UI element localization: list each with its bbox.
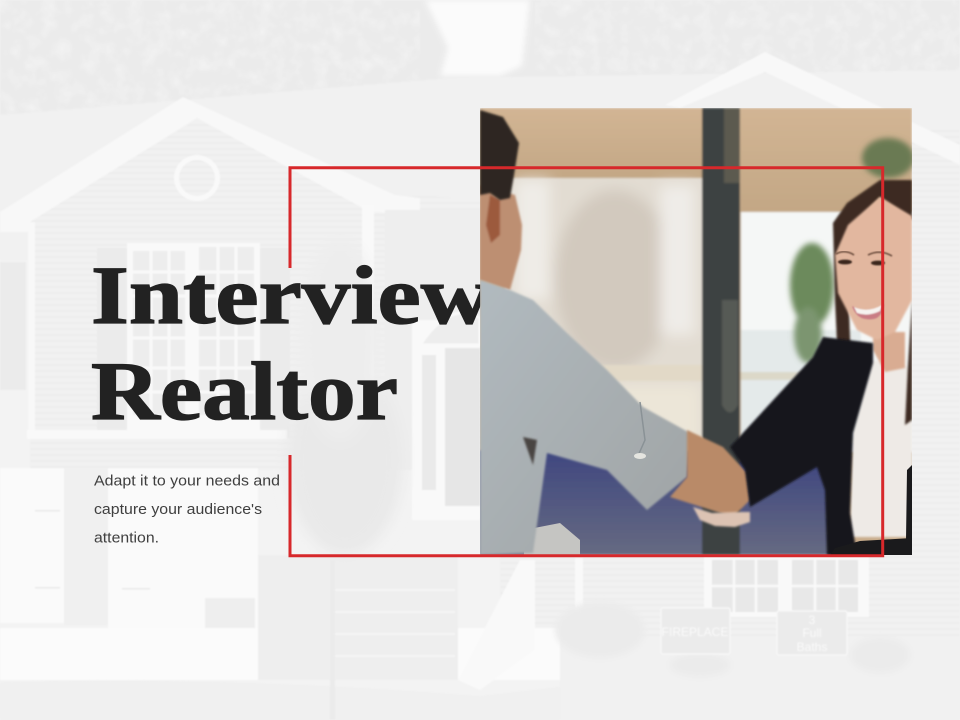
title — [91, 249, 491, 437]
body line 2: capture your audience's — [94, 501, 262, 518]
porch — [362, 205, 480, 520]
photo: business handshake — [480, 108, 914, 555]
background plants — [790, 138, 914, 363]
roof — [0, 70, 960, 260]
man: forearm and hand — [670, 430, 750, 517]
woman: hand — [693, 507, 750, 527]
man: hair — [480, 110, 519, 200]
man: sleeve cuff details — [523, 402, 646, 465]
ground — [0, 628, 560, 680]
siding walls — [30, 200, 490, 470]
woman: hair back — [833, 180, 912, 425]
sign: full baths: Full — [802, 626, 822, 640]
right gable trim — [665, 52, 960, 165]
man: shirt — [480, 280, 690, 555]
title line 2: Realtor — [91, 345, 398, 437]
round gable vent — [174, 155, 220, 201]
sign: full baths — [777, 611, 847, 655]
left gable trim — [0, 97, 420, 232]
red frame — [290, 168, 883, 556]
background trees — [0, 0, 960, 116]
woman: blazer lower — [830, 465, 912, 555]
body line 1: Adapt it to your needs and — [94, 472, 280, 490]
front window left — [97, 243, 290, 438]
woman: smile — [852, 304, 884, 319]
title line 1: Interview — [91, 249, 491, 341]
office backdrop — [480, 108, 912, 555]
woman: eyes and brows — [836, 252, 892, 265]
woman: blouse — [850, 360, 912, 537]
garage doors — [0, 468, 258, 638]
sign: full baths: Baths — [797, 640, 827, 654]
shrubs — [555, 602, 910, 677]
body line 3: attention. — [94, 530, 159, 546]
small tree — [287, 240, 403, 555]
sign: full baths: 3 — [809, 613, 816, 627]
man: neck and ear — [480, 185, 522, 290]
front steps — [258, 555, 535, 720]
sign: fireplace: FIREPLACE — [662, 625, 728, 639]
lower right windows — [704, 555, 869, 617]
body text — [94, 472, 280, 546]
woman: face and neck — [835, 197, 912, 372]
papers on desk — [524, 523, 580, 555]
woman: blazer — [730, 337, 873, 555]
sign: fireplace — [661, 608, 730, 654]
